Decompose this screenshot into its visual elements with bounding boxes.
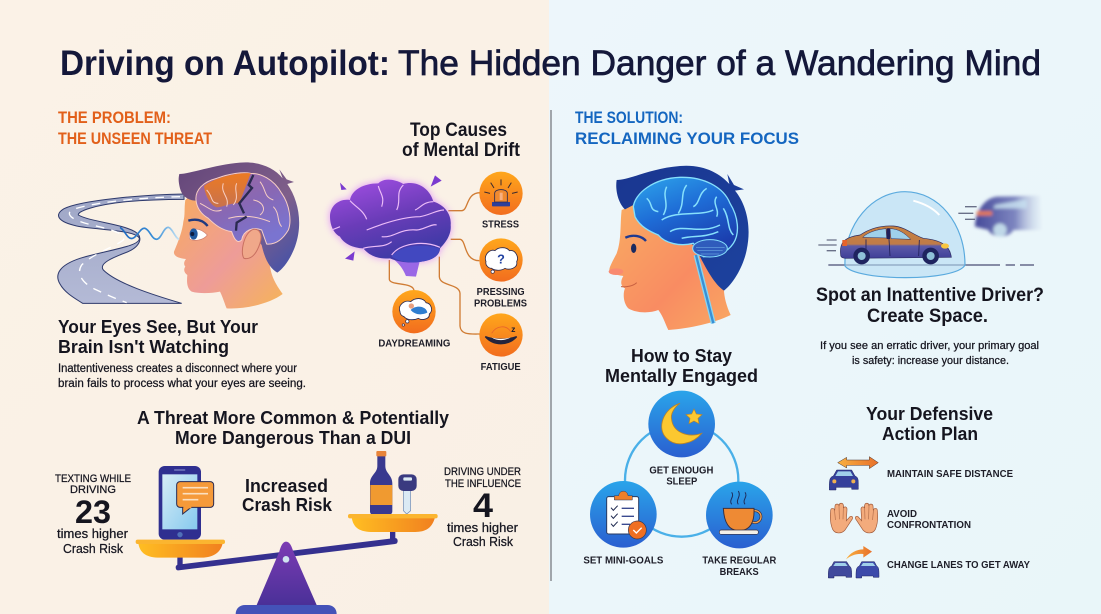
heading: threat: A Threat More Common & Potentially <box>137 407 450 428</box>
right pan <box>348 514 438 532</box>
label: take regular breaks: TAKE REGULAR <box>702 555 777 566</box>
icon: daydreaming cloud <box>392 290 436 333</box>
glowing brain <box>633 177 737 257</box>
eye <box>188 220 208 240</box>
car <box>840 226 951 264</box>
heading: how to stay mentally engaged <box>605 345 758 386</box>
heading: your defensive action plan: Action Plan <box>882 423 978 444</box>
stat: texting while driving: TEXTING WHILE <box>55 473 131 485</box>
panel: DUI comparison <box>55 407 521 614</box>
title: Driving on Autopilot: <box>60 44 390 83</box>
label: pressing problems <box>474 287 527 310</box>
heading: the problem: THE UNSEEN THREAT <box>58 129 213 148</box>
label: avoid confrontation: AVOID <box>887 508 917 520</box>
icon: fatigue eye: z <box>511 324 516 334</box>
list: defensive actions <box>828 457 1030 578</box>
beam <box>176 531 398 570</box>
heading: how to stay mentally engaged: How to Stay <box>631 345 733 366</box>
icon: moon <box>648 391 715 457</box>
icon: safe distance car <box>829 457 878 490</box>
illustration: car in protective bubble <box>818 192 1042 278</box>
label: take regular breaks <box>702 555 777 578</box>
diagram: brain with causes <box>330 172 527 373</box>
icon: pressing problems cloud: ? <box>497 252 505 266</box>
heading: your defensive action plan <box>866 403 993 444</box>
key <box>398 474 417 514</box>
label: get enough sleep <box>649 465 713 487</box>
ground <box>828 263 1034 267</box>
stat: driving under the influence <box>444 466 521 549</box>
heading: spot an inattentive driver <box>816 285 1044 327</box>
background: problem side <box>0 0 549 614</box>
background: solution side <box>549 0 1101 614</box>
text block: safety advice: is safety: increase your distance. <box>852 355 1009 367</box>
sparks <box>340 175 442 261</box>
heading: eyes see: Brain Isn't Watching <box>58 336 229 357</box>
text block: explanation: brain fails to process what your eyes are seeing. <box>58 378 306 390</box>
heading: increased crash risk: Crash Risk <box>242 494 333 515</box>
chart: balance scale <box>136 451 438 614</box>
stat: driving under the influence: THE INFLUENCE <box>445 478 521 490</box>
stat: texting while driving: DRIVING <box>70 484 116 496</box>
brain <box>196 173 290 244</box>
text block: explanation: Inattentiveness creates a disconnect where your <box>58 363 297 375</box>
text block: safety advice: If you see an erratic driver, your primary goal <box>820 340 1039 352</box>
panel: top causes <box>330 119 527 373</box>
ring <box>625 423 738 537</box>
heading: your defensive action plan: Your Defensive <box>866 403 993 424</box>
icon: pressing problems cloud <box>479 238 523 282</box>
left pan <box>136 540 225 558</box>
label: daydreaming: DAYDREAMING <box>378 339 450 350</box>
heading: the solution: RECLAIMING YOUR FOCUS <box>575 129 799 148</box>
face details <box>609 236 646 287</box>
heading: the solution <box>575 108 799 148</box>
label: stress: STRESS <box>482 219 519 230</box>
icon: change lanes <box>828 546 879 578</box>
illustration: winding road and distracted head <box>58 162 299 308</box>
heading: the problem <box>58 108 213 148</box>
stat: driving under the influence: DRIVING UNDER <box>444 466 521 478</box>
heading: spot an inattentive driver: Create Space. <box>867 306 988 327</box>
heading: threat: More Dangerous Than a DUI <box>175 427 411 448</box>
label: get enough sleep: SLEEP <box>666 476 697 487</box>
icon: raised hands <box>830 503 878 533</box>
label: pressing problems: PROBLEMS <box>474 299 527 310</box>
text block: explanation <box>58 363 306 390</box>
label: take regular breaks: BREAKS <box>720 567 759 578</box>
title <box>60 44 1041 83</box>
heading: top causes: of Mental Drift <box>402 139 520 161</box>
heading: threat <box>137 407 450 448</box>
blurred erratic car <box>975 196 1042 237</box>
label: change lanes: CHANGE LANES TO GET AWAY <box>887 559 1030 571</box>
label: get enough sleep: GET ENOUGH <box>649 465 713 476</box>
purple brain <box>330 180 451 277</box>
heading: increased crash risk: Increased <box>245 475 328 496</box>
illustration: focused head <box>609 166 749 330</box>
text block: safety advice <box>820 340 1039 367</box>
heading: increased crash risk <box>242 475 333 515</box>
panel: the solution <box>575 108 1044 578</box>
icon: fatigue eye <box>479 313 523 357</box>
label: fatigue: FATIGUE <box>481 362 521 373</box>
heading: eyes see: Your Eyes See, But Your <box>58 316 258 337</box>
stat: driving under the influence: 4 <box>473 487 493 525</box>
heading: spot an inattentive driver: Spot an Inattentive Driver? <box>816 285 1044 306</box>
label: avoid confrontation <box>887 508 971 531</box>
label: avoid confrontation: CONFRONTATION <box>887 519 971 531</box>
head skin <box>174 190 283 308</box>
spine <box>696 255 713 323</box>
heading: top causes: Top Causes <box>410 119 507 141</box>
heading: the solution: THE SOLUTION: <box>575 108 683 127</box>
heading: how to stay mentally engaged: Mentally Engaged <box>605 365 758 386</box>
hair <box>616 166 749 291</box>
road <box>58 194 184 303</box>
speed lines <box>818 207 977 251</box>
label: maintain safe distance: MAINTAIN SAFE DISTANCE <box>887 468 1013 480</box>
stat: driving under the influence: times higher <box>447 520 519 535</box>
diagram: three engagement habits <box>583 391 777 578</box>
icon: clipboard <box>590 481 657 548</box>
heading: eyes see <box>58 316 258 357</box>
fulcrum base <box>236 605 337 614</box>
stat: texting while driving <box>55 473 131 556</box>
skin <box>609 203 731 330</box>
ear <box>242 229 261 259</box>
panel: the problem <box>58 108 306 390</box>
crack <box>236 175 253 231</box>
fulcrum <box>257 542 317 605</box>
stat: texting while driving: Crash Risk <box>63 541 123 556</box>
stat: driving under the influence: Crash Risk <box>453 534 513 549</box>
label: pressing problems: PRESSING <box>477 287 525 298</box>
heading: top causes <box>402 119 520 161</box>
phone <box>159 466 214 540</box>
connectors <box>389 193 480 334</box>
stat: texting while driving: 23 <box>75 494 111 530</box>
icon: coffee cup <box>706 482 773 548</box>
title: The Hidden Danger of a Wandering Mind <box>398 44 1041 83</box>
dome <box>845 192 965 278</box>
label: set mini-goals: SET MINI-GOALS <box>583 555 663 566</box>
stat: texting while driving: times higher <box>57 526 129 541</box>
icon: stress siren <box>479 172 523 215</box>
bottle <box>370 451 392 514</box>
wave <box>120 227 179 239</box>
orange lobe <box>204 173 251 207</box>
heading: the problem: THE PROBLEM: <box>58 108 171 127</box>
hair <box>179 162 299 273</box>
